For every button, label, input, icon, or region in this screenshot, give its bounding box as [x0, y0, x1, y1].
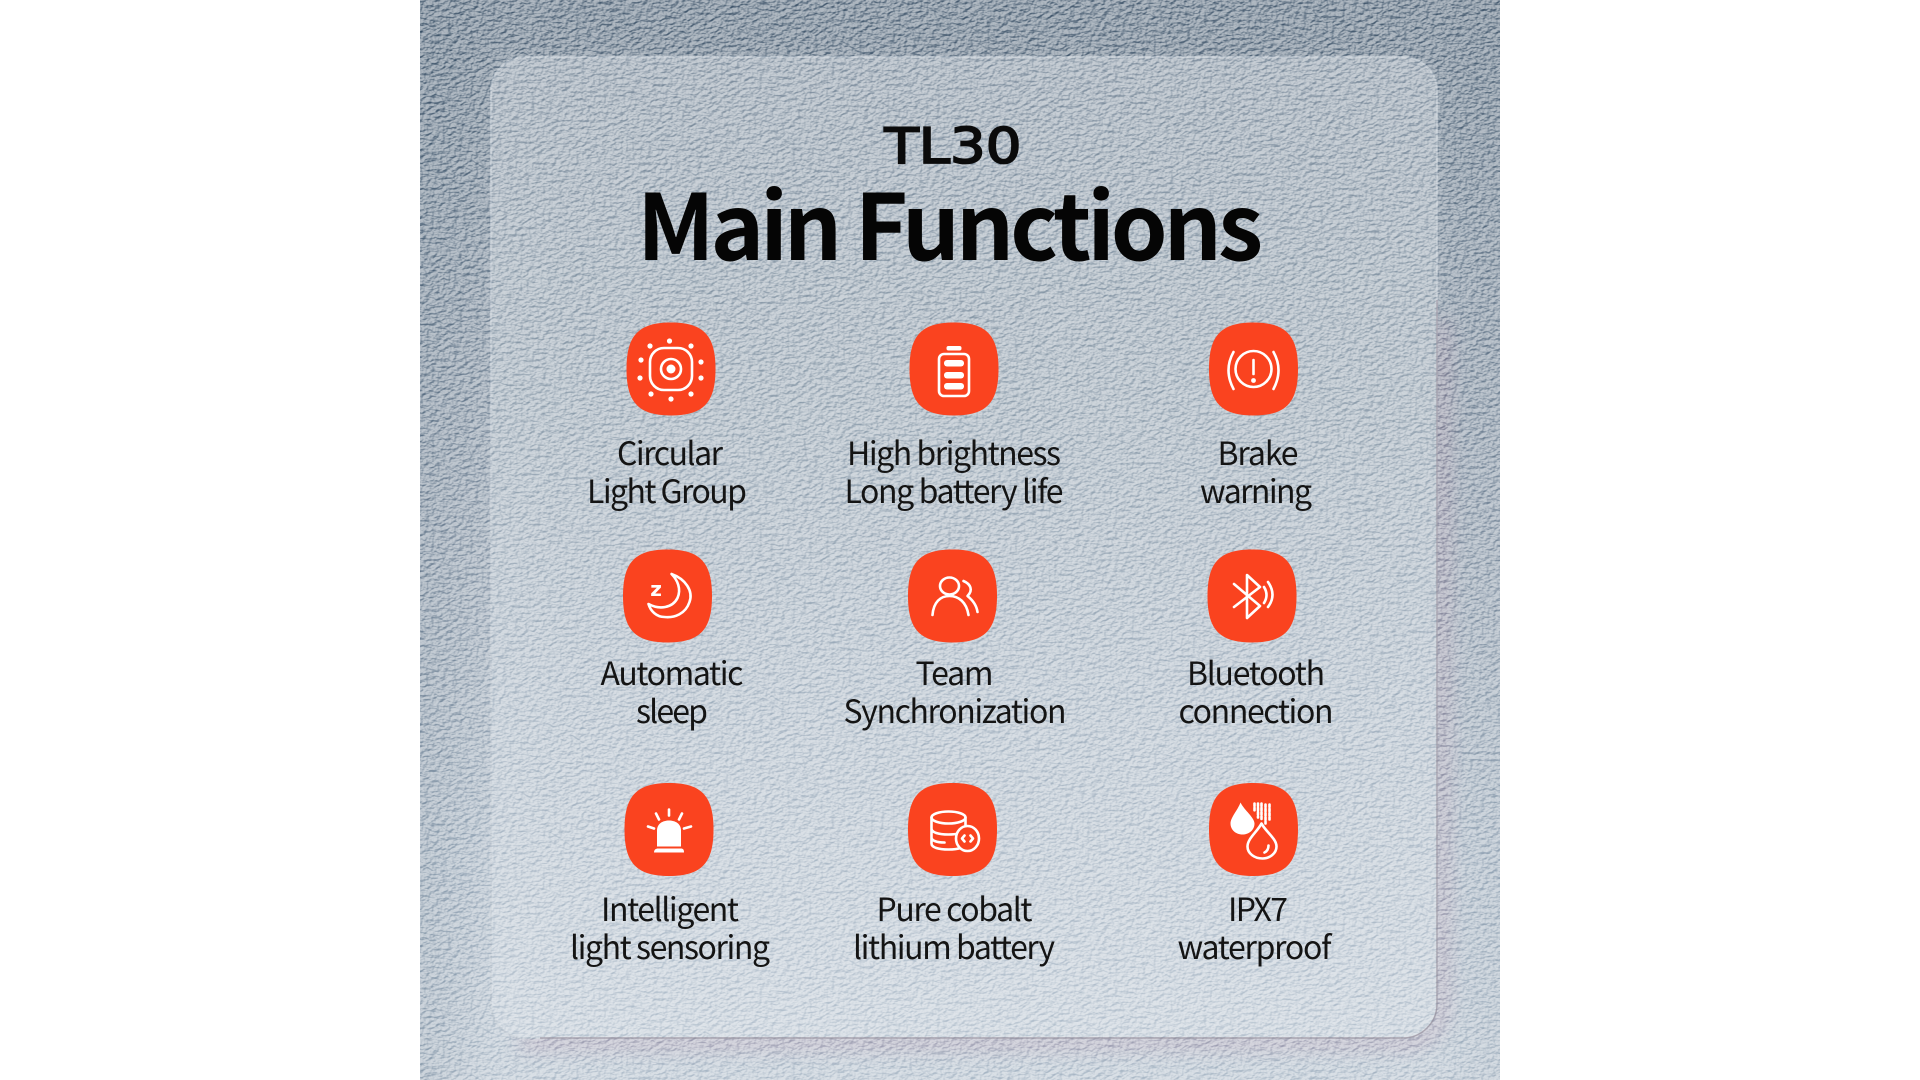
icon: water drops [1209, 783, 1298, 876]
label: Intelligent light sensoring [570, 885, 770, 969]
label: Team Synchronization [844, 649, 1066, 733]
feature: IPX7 waterproof [1178, 783, 1333, 969]
paper grain texture [420, 0, 1500, 1080]
label: Brake warning: warning [1200, 467, 1312, 513]
panel: main functions card [491, 57, 1437, 1038]
feature: circular light group [587, 322, 747, 513]
feature: bluetooth connection [1178, 550, 1334, 733]
icon: battery [910, 322, 998, 416]
textured background [420, 0, 1500, 1080]
icon: brake warning [1209, 322, 1298, 416]
label: Circular Light Group: Light Group [587, 467, 747, 513]
icon: cell stack [908, 783, 997, 876]
icon: team [908, 550, 997, 642]
label: Pure cobalt lithium battery: lithium battery [853, 923, 1055, 969]
label: Circular Light Group [587, 429, 747, 513]
feature: team synchronization [844, 550, 1066, 733]
feature: automatic sleep [600, 550, 744, 733]
label: High brightness Long battery life: High brightness [847, 429, 1061, 475]
label: Automatic sleep [600, 649, 744, 733]
icon: moon and z [623, 550, 712, 642]
label: IPX7 waterproof [1178, 885, 1333, 969]
label: High brightness Long battery life: Long battery life [844, 467, 1064, 513]
label: Team Synchronization: Synchronization [844, 687, 1066, 733]
label: Circular Light Group: Circular [617, 429, 724, 475]
panel bottom-right edge [540, 300, 1437, 1038]
label: Pure cobalt lithium battery [853, 885, 1055, 969]
icon: alarm beacon [624, 783, 714, 876]
label: Intelligent light sensoring: light sensoring [570, 923, 770, 969]
label: Bluetooth connection: Bluetooth [1187, 649, 1325, 695]
label: IPX7 waterproof: waterproof [1178, 923, 1333, 969]
label: Pure cobalt lithium battery: Pure cobalt [876, 885, 1032, 931]
label: Bluetooth connection [1178, 649, 1334, 733]
feature: high brightness long battery life [844, 322, 1064, 513]
label: Automatic sleep: sleep [636, 687, 708, 733]
label: Automatic sleep: Automatic [600, 649, 744, 695]
label: Brake warning [1200, 429, 1312, 513]
label: Team Synchronization: Team [916, 649, 994, 695]
feature: brake warning [1200, 322, 1312, 513]
title: TL30: TL30 [883, 118, 1022, 175]
feature: pure cobalt lithium battery [853, 783, 1055, 969]
icon: bluetooth [1208, 550, 1296, 642]
feature: intelligent light sensoring [570, 783, 770, 969]
icon: circular light [626, 322, 716, 416]
heading: Main Functions: Main Functions [637, 155, 1263, 287]
label: IPX7 waterproof: IPX7 [1228, 885, 1288, 931]
label: High brightness Long battery life [844, 429, 1064, 513]
label: Bluetooth connection: connection [1178, 687, 1334, 733]
label: Intelligent light sensoring: Intelligent [601, 885, 739, 931]
label: Brake warning: Brake [1218, 429, 1298, 475]
icon: moon and z: z [650, 577, 662, 601]
